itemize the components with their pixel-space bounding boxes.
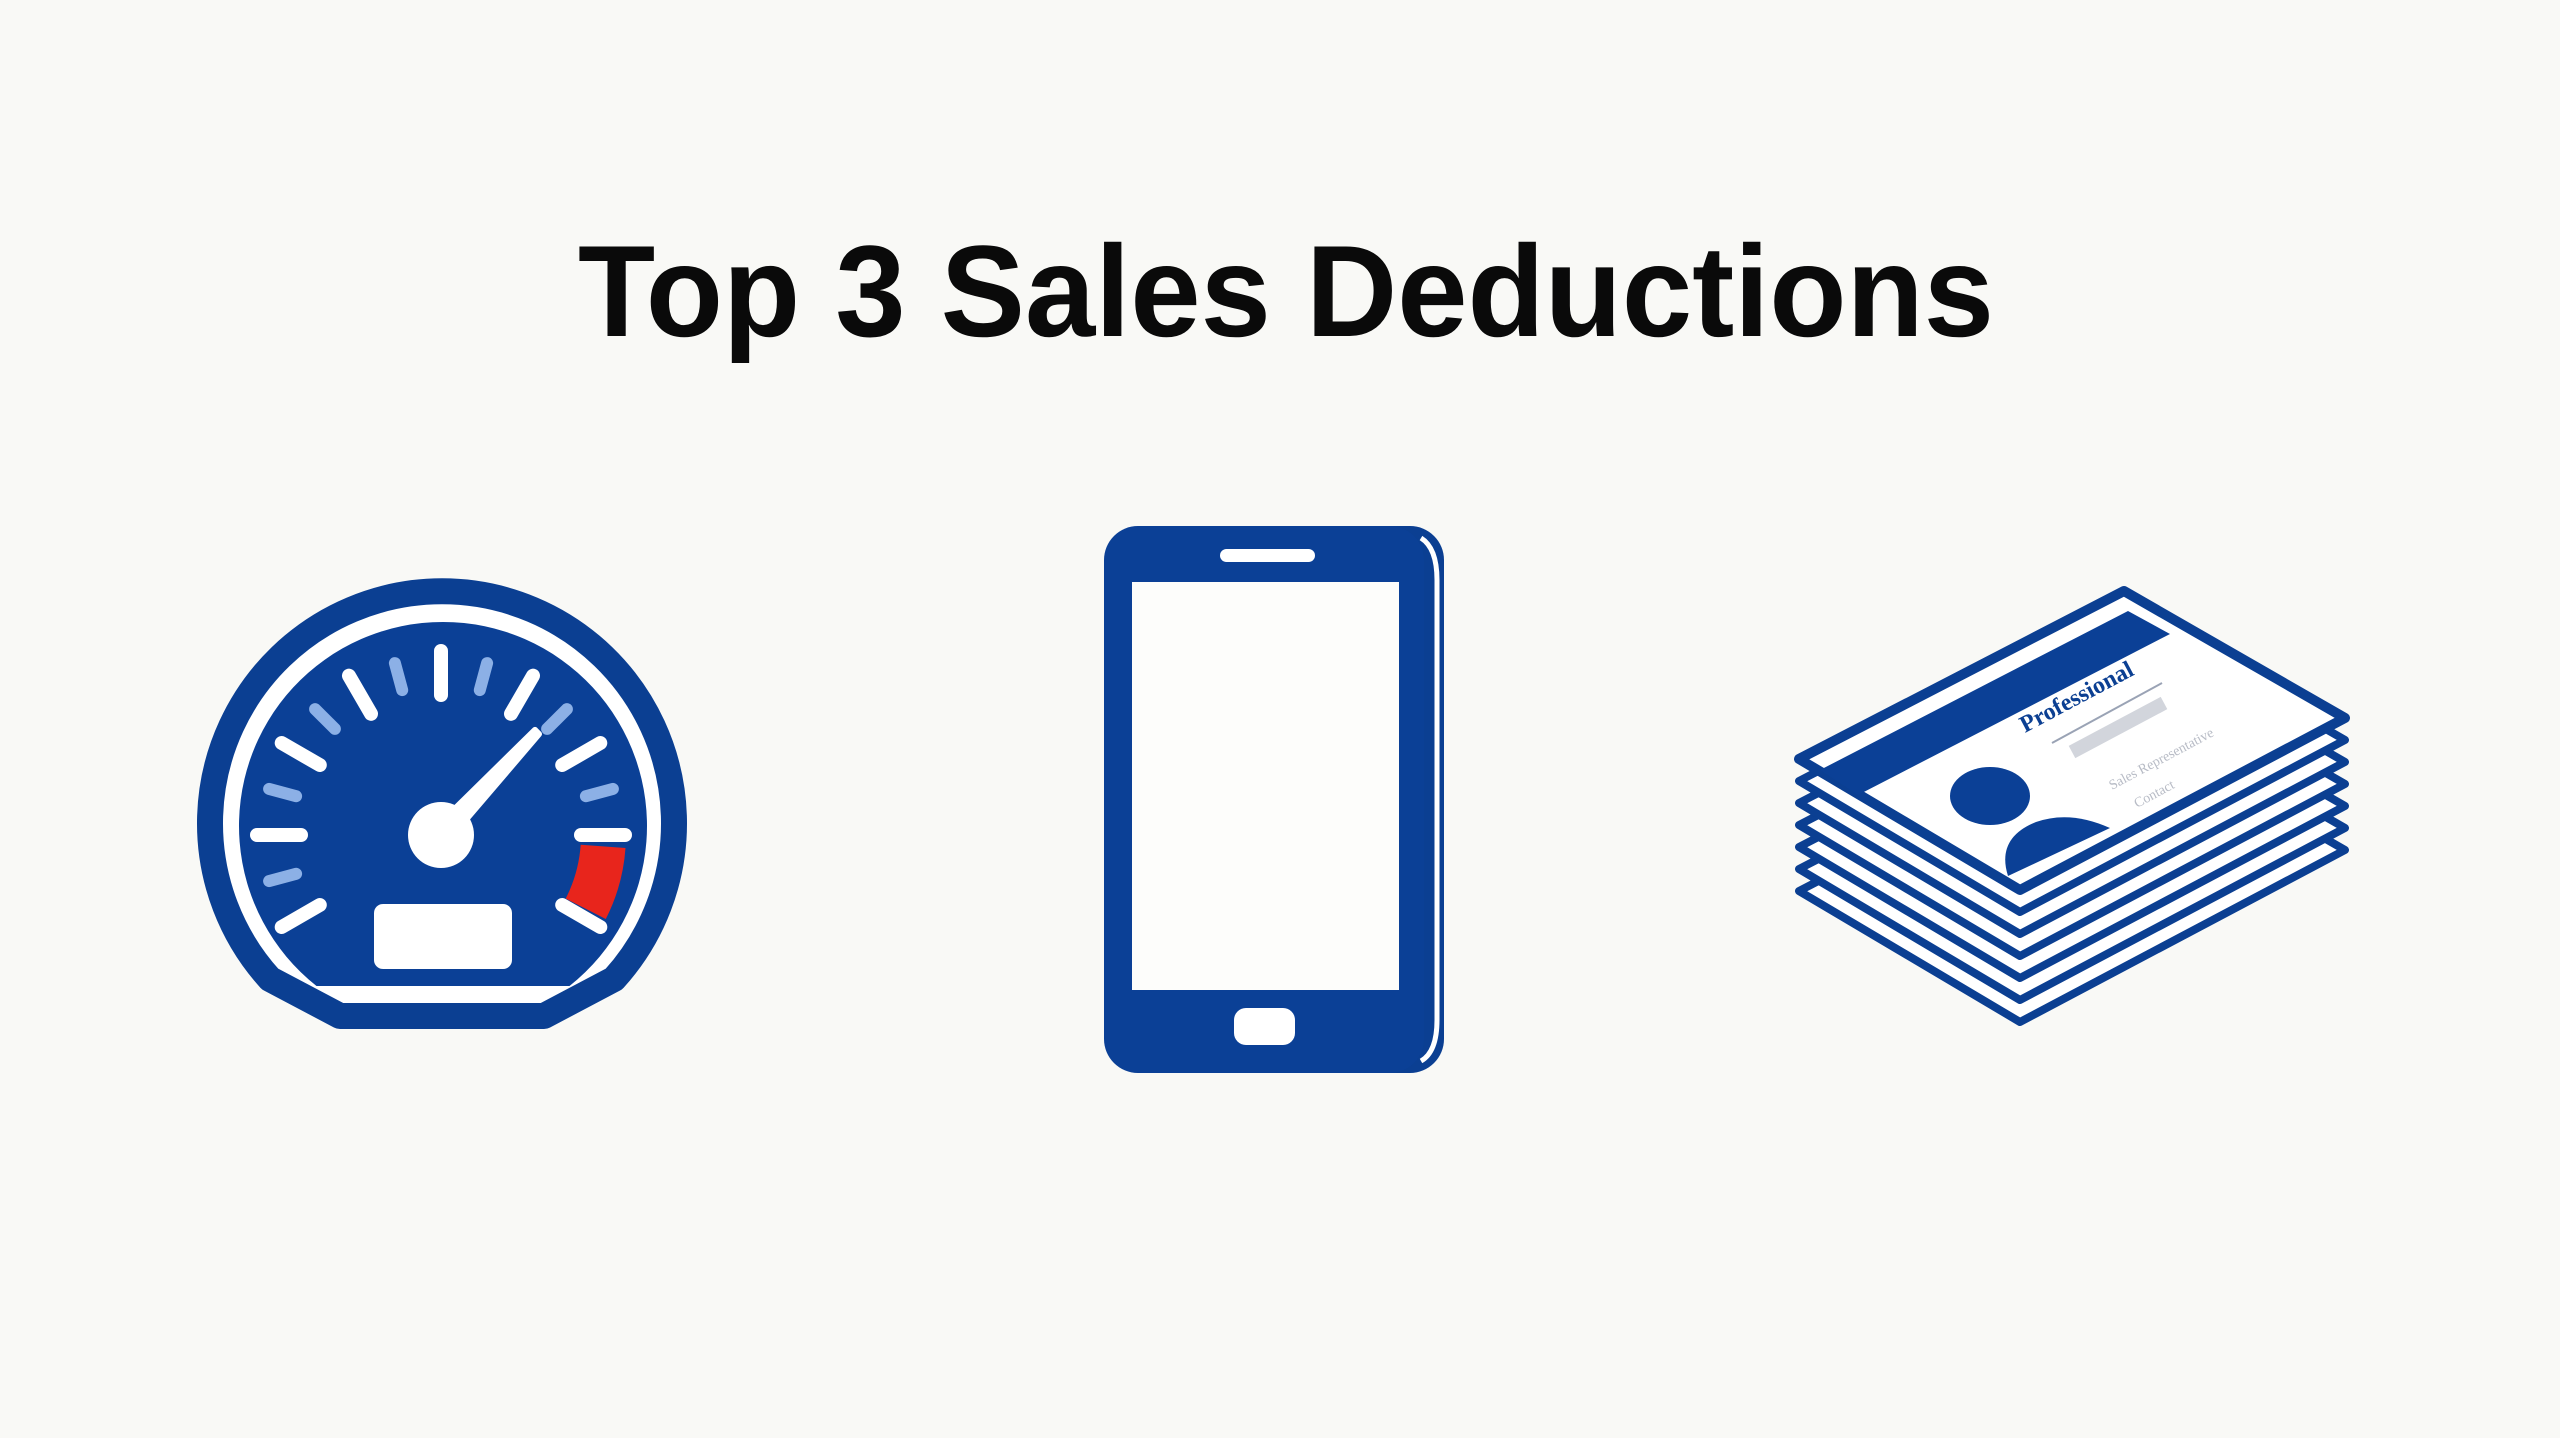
icon: business cards stack: Sales Representative	[2107, 726, 2217, 794]
icon: business cards stack	[1799, 591, 2345, 1022]
icon: speedometer	[210, 591, 674, 1016]
icon: business cards stack: Contact	[2132, 778, 2177, 812]
icon: business cards stack: Professional	[2016, 657, 2138, 738]
title: Top 3 Sales Deductions	[578, 218, 1994, 364]
icon: smartphone	[1104, 526, 1444, 1073]
